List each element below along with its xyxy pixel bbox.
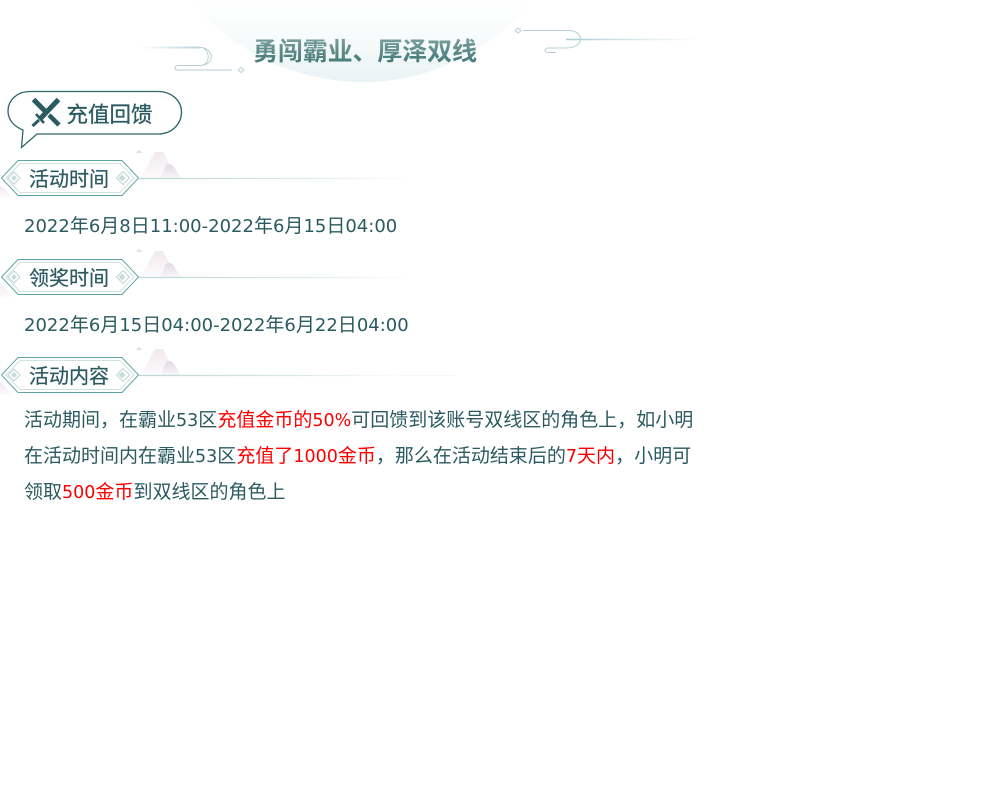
heading label: 活动时间 <box>29 163 109 192</box>
header ornament and title <box>147 28 684 82</box>
left flourish <box>140 48 244 72</box>
heading label: 活动内容 <box>29 360 109 389</box>
title: 勇闯霸业、厚泽双线 <box>253 32 477 68</box>
activity description: 在活动时间内在霸业53区充值了1000金币，那么在活动结束后的7天内，小明可 <box>24 445 691 467</box>
heading label: 领奖时间 <box>29 262 109 291</box>
activity description: 领取500金币到双线区的角色上 <box>24 481 285 503</box>
arc backdrop <box>190 0 522 82</box>
line extension <box>400 374 455 376</box>
activity time: 2022年6月8日11:00-2022年6月15日04:00 <box>24 215 397 237</box>
activity description <box>24 409 693 503</box>
bubble label: 充值回馈 <box>66 98 153 129</box>
activity description: 活动期间，在霸业53区充值金币的50%可回馈到该账号双线区的角色上，如小明 <box>24 409 693 431</box>
icon: crossed swords <box>32 100 59 126</box>
section heading: 活动时间 <box>0 150 388 196</box>
right flourish <box>515 28 700 52</box>
section heading: 活动内容 <box>0 347 455 393</box>
speech bubble heading <box>7 90 182 149</box>
section heading: 领奖时间 <box>0 249 388 295</box>
claim time: 2022年6月15日04:00-2022年6月22日04:00 <box>24 314 409 336</box>
